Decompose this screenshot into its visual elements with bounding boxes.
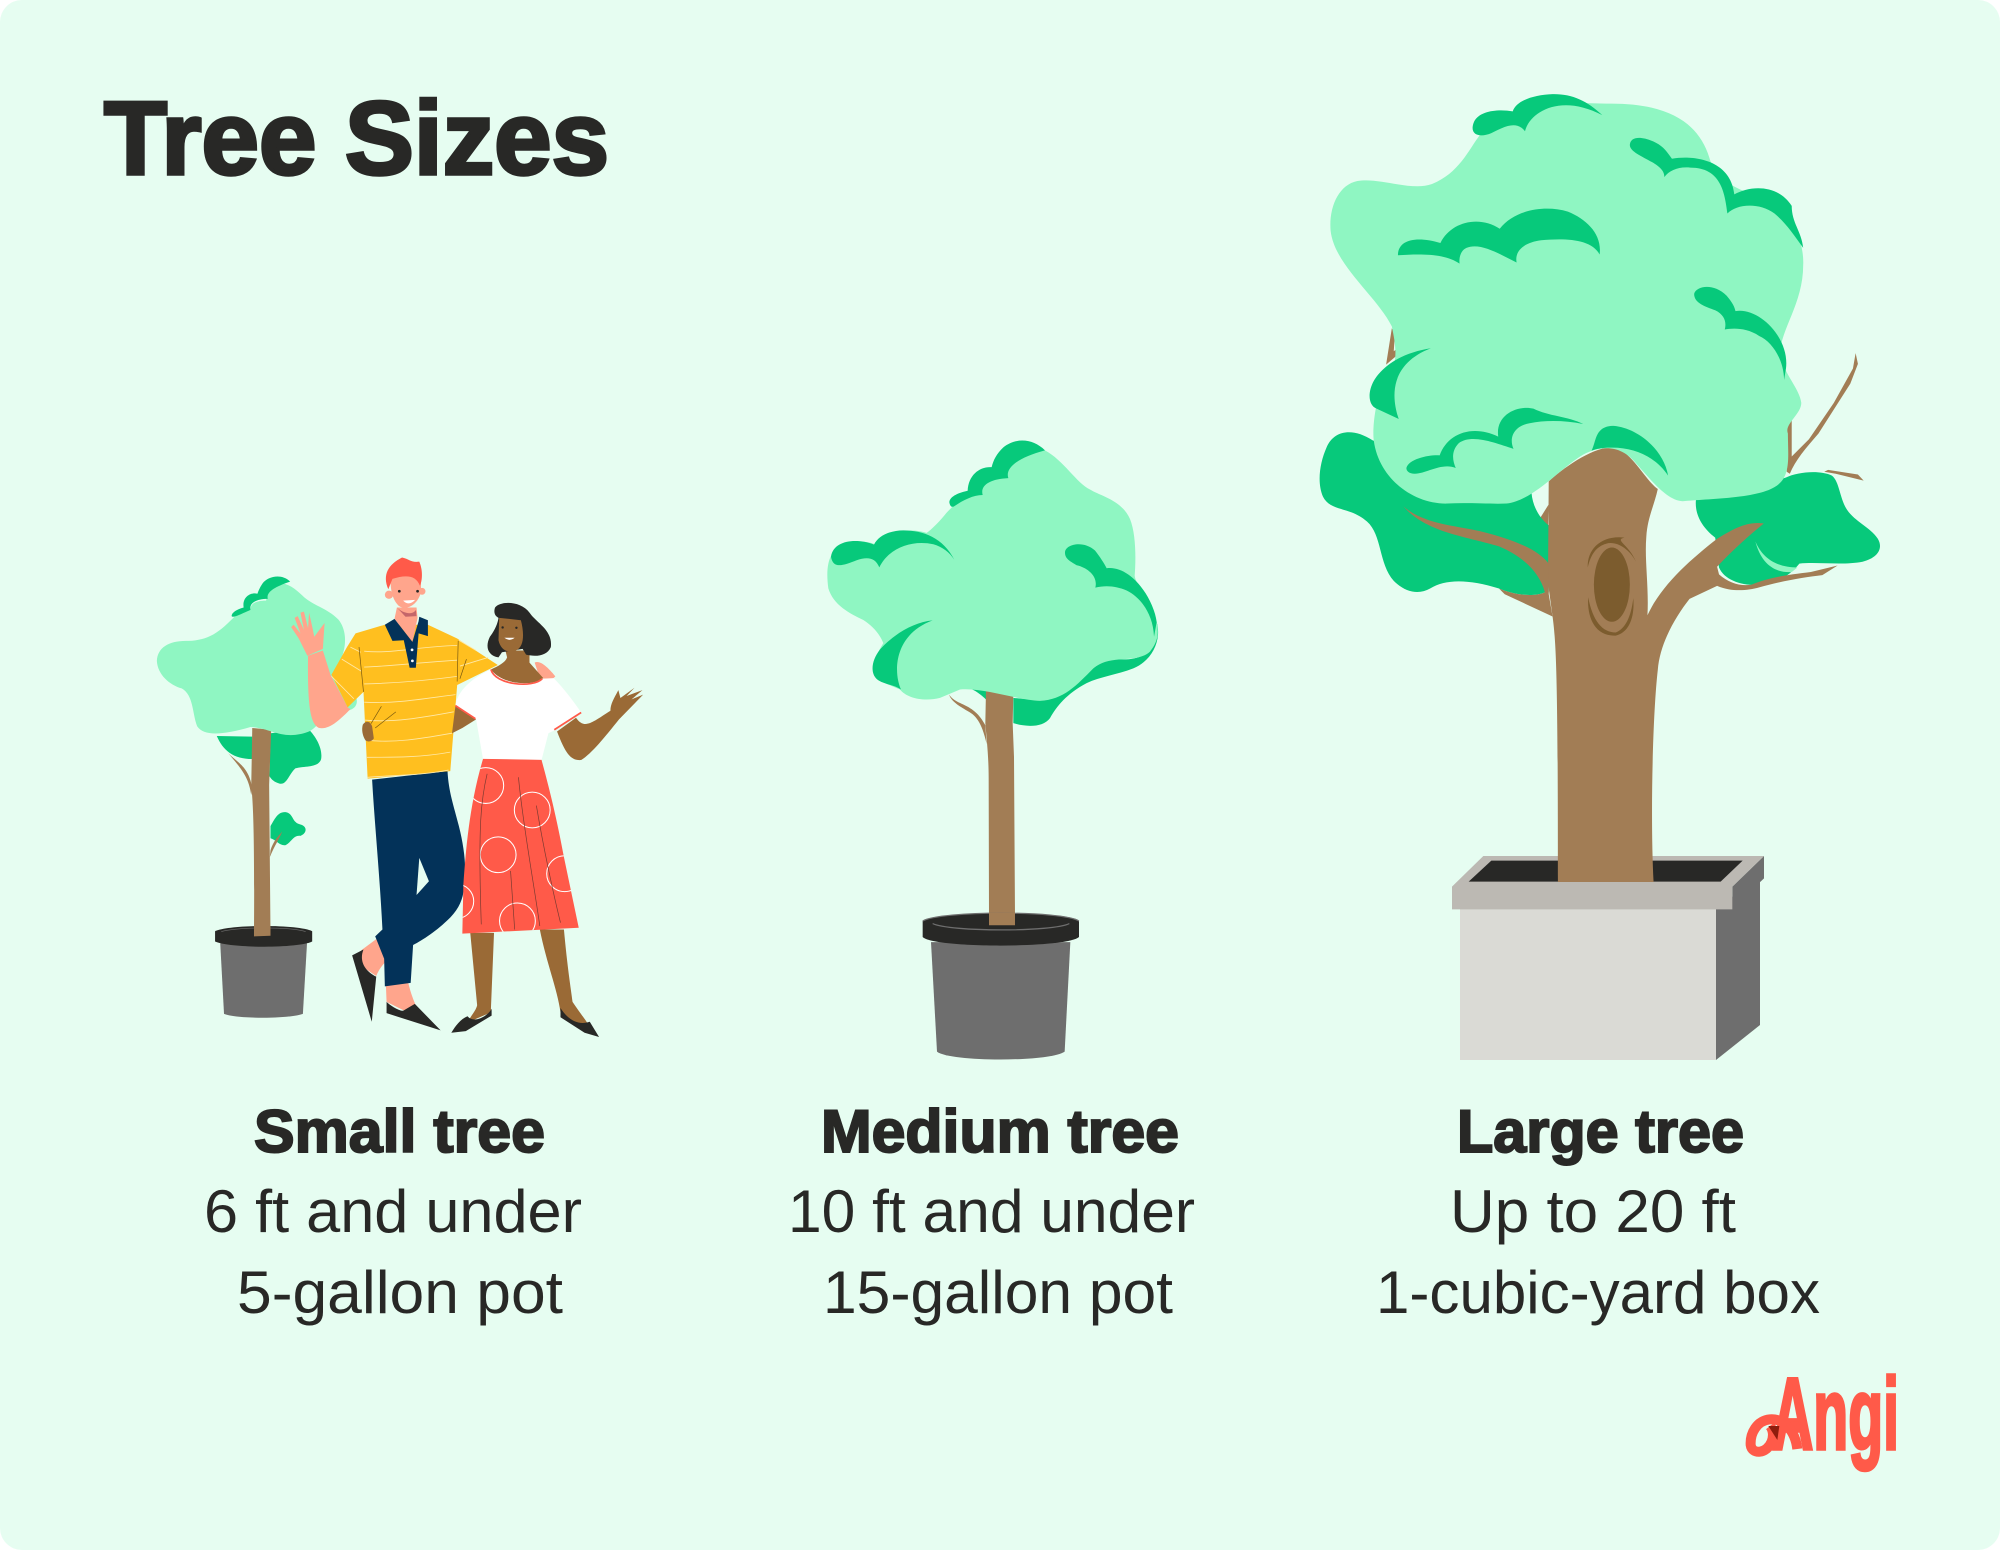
man's collar [385, 607, 428, 668]
medium tree label: 10 ft and under [788, 1178, 1195, 1245]
title: Tree Sizes [104, 81, 609, 197]
Angi logo [1751, 1357, 1899, 1471]
man's shirt [331, 625, 498, 779]
trunk and branches [1403, 447, 1838, 882]
medium tree pot [923, 913, 1079, 1059]
man's hand on woman's shoulder [535, 662, 555, 680]
small tree pot [215, 926, 312, 1018]
small tree top tuft [232, 577, 290, 617]
woman's top [455, 651, 581, 761]
large tree label: Up to 20 ft [1450, 1178, 1736, 1245]
light sliver [1755, 541, 1797, 572]
canopy tufts [1370, 94, 1803, 476]
couple illustration [291, 558, 643, 1037]
dark foliage masses [1320, 432, 1880, 595]
woman's raised arm [557, 688, 643, 760]
medium tree label: Medium tree [821, 1098, 1179, 1165]
small tree illustration [157, 577, 357, 1018]
twigs [1386, 328, 1864, 525]
medium tree trunk [949, 689, 1015, 917]
woman's skirt [462, 759, 579, 934]
medium tree label [788, 1098, 1195, 1326]
Angi logo: Angi [1772, 1357, 1899, 1471]
large tree label [1376, 1098, 1820, 1326]
planter box [1452, 856, 1764, 1060]
small tree trunk [228, 728, 282, 936]
trunk knot [1588, 537, 1636, 636]
woman's hand on man's waist [362, 706, 476, 741]
woman's legs [451, 929, 599, 1037]
large tree body [1320, 94, 1880, 882]
medium tree canopy [827, 450, 1158, 701]
large tree label: 1-cubic-yard box [1376, 1259, 1820, 1326]
man's head [385, 558, 425, 608]
medium tree dark back foliage [960, 622, 1158, 726]
medium tree tufts [831, 441, 1157, 689]
small tree dark foliage [217, 649, 341, 845]
large tree illustration [1320, 94, 1880, 1060]
small tree label: 5-gallon pot [237, 1259, 563, 1326]
large tree canopy [1330, 103, 1803, 504]
small tree canopy [157, 583, 357, 735]
medium tree illustration [827, 441, 1158, 1059]
small tree label: Small tree [254, 1098, 545, 1165]
small tree label [204, 1098, 582, 1326]
man's legs [352, 771, 465, 1030]
man's raised arm [291, 612, 350, 728]
small tree label: 6 ft and under [204, 1178, 582, 1245]
woman's head [488, 603, 551, 657]
medium tree label: 15-gallon pot [823, 1259, 1173, 1326]
large tree label: Large tree [1457, 1098, 1744, 1165]
